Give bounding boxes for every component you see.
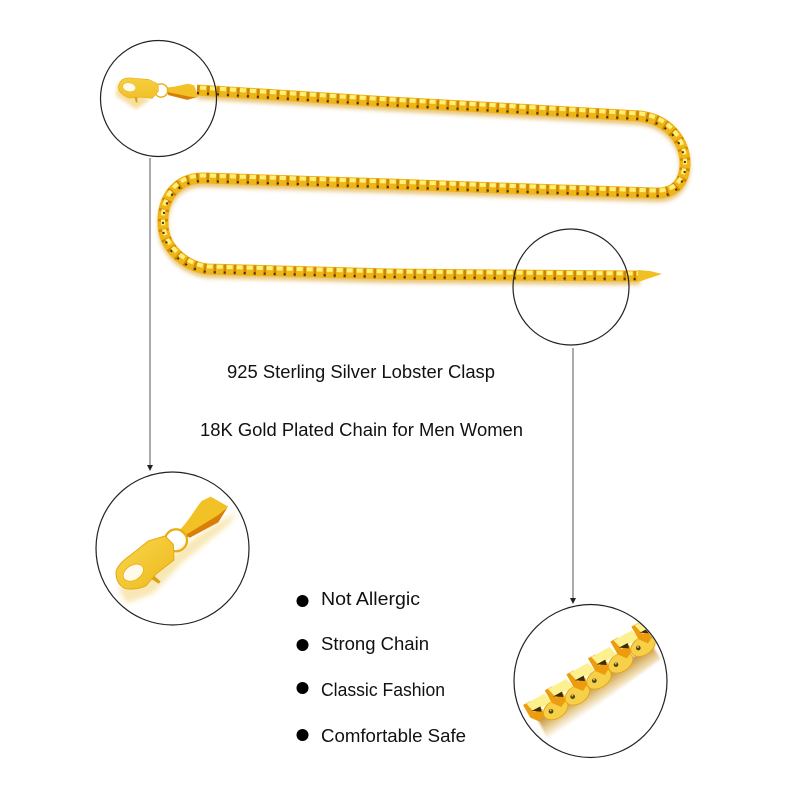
bullet: Classic Fashion: Classic Fashion <box>321 679 445 700</box>
bullet: Comfortable Safe: Comfortable Safe <box>321 725 466 746</box>
detail circle: lobster clasp <box>96 472 249 625</box>
arrow: chain to detail <box>570 348 576 604</box>
gold box chain <box>163 88 685 280</box>
small lobster clasp on chain <box>110 46 202 137</box>
bullet: Strong Chain: Strong Chain <box>321 633 429 654</box>
detail circle: box chain links <box>514 604 680 758</box>
circle: chain highlight <box>513 229 629 345</box>
bullet list: features <box>296 588 466 746</box>
title text: product description: 18K Gold Plated Chain for Men Women <box>200 419 523 440</box>
arrow: clasp to detail <box>147 158 153 471</box>
bullet: Not Allergic: Not Allergic <box>321 588 420 609</box>
title text: product description <box>200 361 523 440</box>
title text: product description: 925 Sterling Silver Lobster Clasp <box>227 361 495 382</box>
chain end tip <box>638 270 662 282</box>
circle: clasp highlight <box>100 40 216 156</box>
